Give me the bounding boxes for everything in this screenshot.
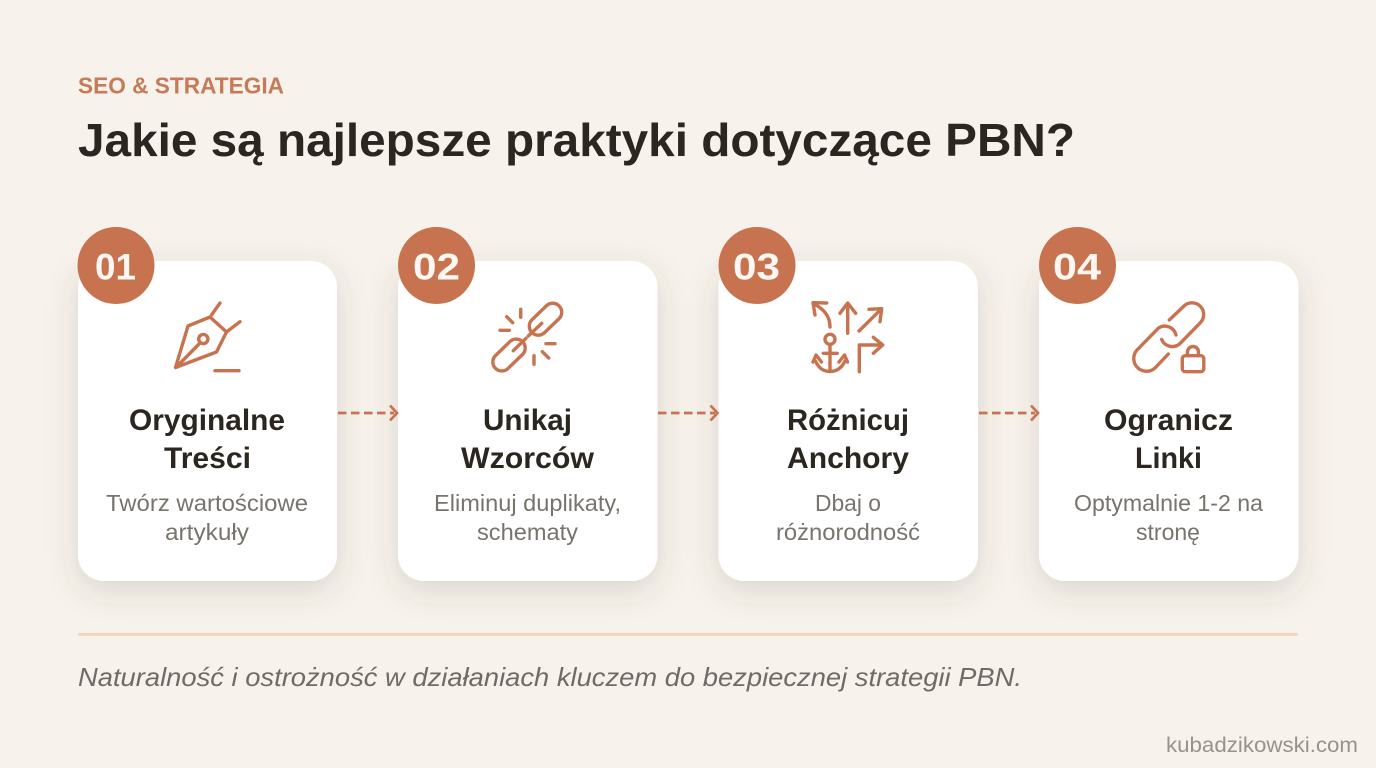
heading: Oryginalne Treści: Treści (164, 442, 251, 475)
closing statement: Naturalność i ostrożność w działaniach kluczem do bezpiecznej strategii PBN. (78, 662, 1022, 692)
heading: Różnicuj Anchory: Różnicuj (787, 404, 909, 437)
card 01 background (78, 261, 337, 581)
badge 01 (78, 227, 154, 304)
arrow: step 1 to 2 (338, 406, 397, 420)
title: Jakie są najlepsze praktyki dotyczące PBN? (78, 114, 1075, 166)
heading: Oryginalne Treści (129, 404, 285, 475)
panel: step 04 (1039, 227, 1298, 581)
description: Eliminuj duplikaty, (434, 490, 621, 516)
description: Optymalnie 1-2 na (1074, 490, 1264, 516)
heading: Ogranicz Linki (1104, 404, 1233, 475)
card 04 background (1039, 261, 1298, 581)
icon: fountain pen (176, 303, 240, 371)
heading: Unikaj Wzorców: Wzorców (461, 442, 594, 475)
arrow: step 3 to 4 (979, 406, 1038, 420)
heading: Różnicuj Anchory (787, 404, 910, 475)
heading: Ogranicz Linki: Ogranicz (1104, 404, 1233, 437)
badge 03 (718, 227, 796, 304)
heading: Ogranicz Linki: Linki (1135, 442, 1202, 475)
icon: anchor with diverging arrows (813, 303, 883, 372)
badge 01: 01 (95, 246, 136, 288)
panel: step 02 (398, 227, 658, 581)
panel: step 03 (718, 227, 978, 581)
description: Dbaj o (815, 490, 881, 516)
heading: Unikaj Wzorców: Unikaj (483, 404, 572, 437)
description: Twórz wartościowe (106, 490, 308, 516)
badge 03: 03 (733, 246, 780, 288)
icon: broken chain (489, 300, 565, 375)
description: artykuły (165, 519, 249, 545)
icon: chain with padlock (1134, 303, 1204, 372)
card 03 background (718, 261, 978, 581)
card 02 background (398, 261, 658, 581)
description: różnorodność (776, 519, 920, 545)
badge 02: 02 (413, 246, 460, 288)
heading: Oryginalne Treści: Oryginalne (129, 404, 285, 437)
heading: Unikaj Wzorców (461, 404, 594, 475)
heading: Różnicuj Anchory: Anchory (787, 442, 910, 475)
badge 04 (1039, 227, 1116, 304)
eyebrow: SEO & STRATEGIA: SEO & STRATEGIA (78, 72, 284, 98)
description (776, 490, 920, 545)
badge 04: 04 (1053, 246, 1101, 288)
description (106, 490, 308, 545)
description (434, 490, 621, 545)
badge 02 (398, 227, 475, 304)
arrow: step 2 to 3 (658, 406, 718, 420)
description (1074, 490, 1264, 545)
description: schematy (477, 519, 578, 545)
watermark: kubadzikowski.com: kubadzikowski.com (1166, 733, 1358, 757)
panel: step 01 (78, 227, 337, 581)
description: stronę (1136, 519, 1200, 545)
